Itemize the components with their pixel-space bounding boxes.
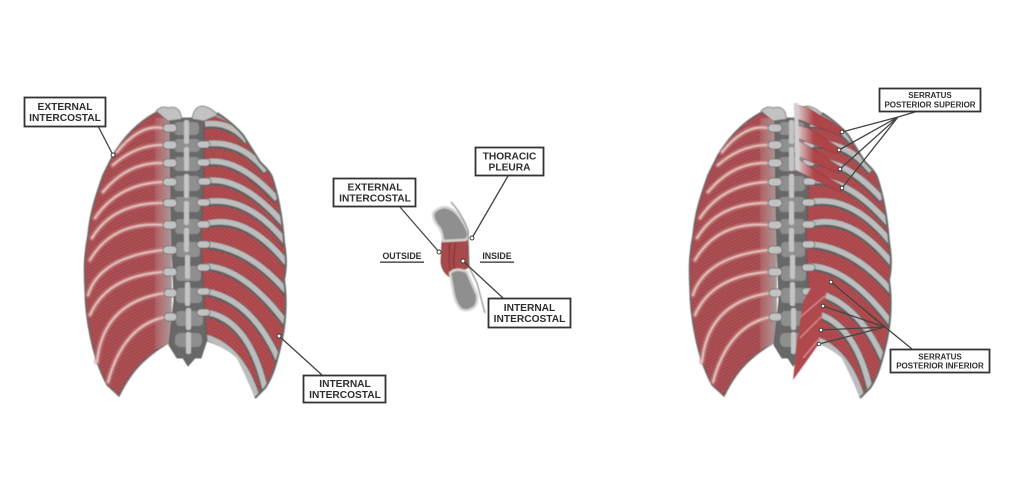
illustration: rib cage and spine [689,106,895,402]
figure: posterior rib cage with external and internal intercostals [24,98,386,402]
muscle: serratus posterior inferior slips [793,275,829,380]
figure: cross-section between two ribs [334,148,570,328]
label: outside: OUTSIDE [382,251,422,261]
muscle: serratus posterior superior slips [794,103,844,192]
callout: external intercostal [24,98,115,157]
callout: serratus posterior superior: POSTERIOR SUPERIOR [884,100,976,110]
callout: external intercostal: EXTERNAL [348,182,402,194]
callout: serratus posterior superior [837,88,980,190]
callout: thoracic pleura [470,148,544,240]
callout: serratus posterior superior: SERRATUS [908,91,952,100]
callout: thoracic pleura: PLEURA [489,162,531,174]
callout: serratus posterior inferior: POSTERIOR INFERIOR [896,362,984,370]
callout: external intercostal [334,178,441,254]
infographic canvas [24,88,990,404]
callout: internal intercostal: INTERNAL [319,379,371,390]
callout: external intercostal: INTERCOSTAL [29,113,101,124]
callout: external intercostal: INTERCOSTAL [339,194,411,204]
callout: external intercostal: EXTERNAL [38,102,92,113]
illustration: rib section with intercostal muscles and pleura [433,202,485,313]
callout: thoracic pleura: THORACIC [483,152,537,162]
callout: serratus posterior inferior [817,280,990,372]
callout: internal intercostal: INTERNAL [504,303,555,314]
callout: serratus posterior inferior: SERRATUS [918,352,962,362]
callout: internal intercostal [277,334,386,402]
label: inside: INSIDE [482,251,512,261]
callout: internal intercostal: INTERCOSTAL [494,314,565,325]
illustration: rib cage, spine and intercostal muscles [84,106,290,402]
figure: rib cage with serratus posterior muscles [689,88,990,402]
callout: internal intercostal [461,259,570,328]
callout: internal intercostal: INTERCOSTAL [309,390,381,401]
